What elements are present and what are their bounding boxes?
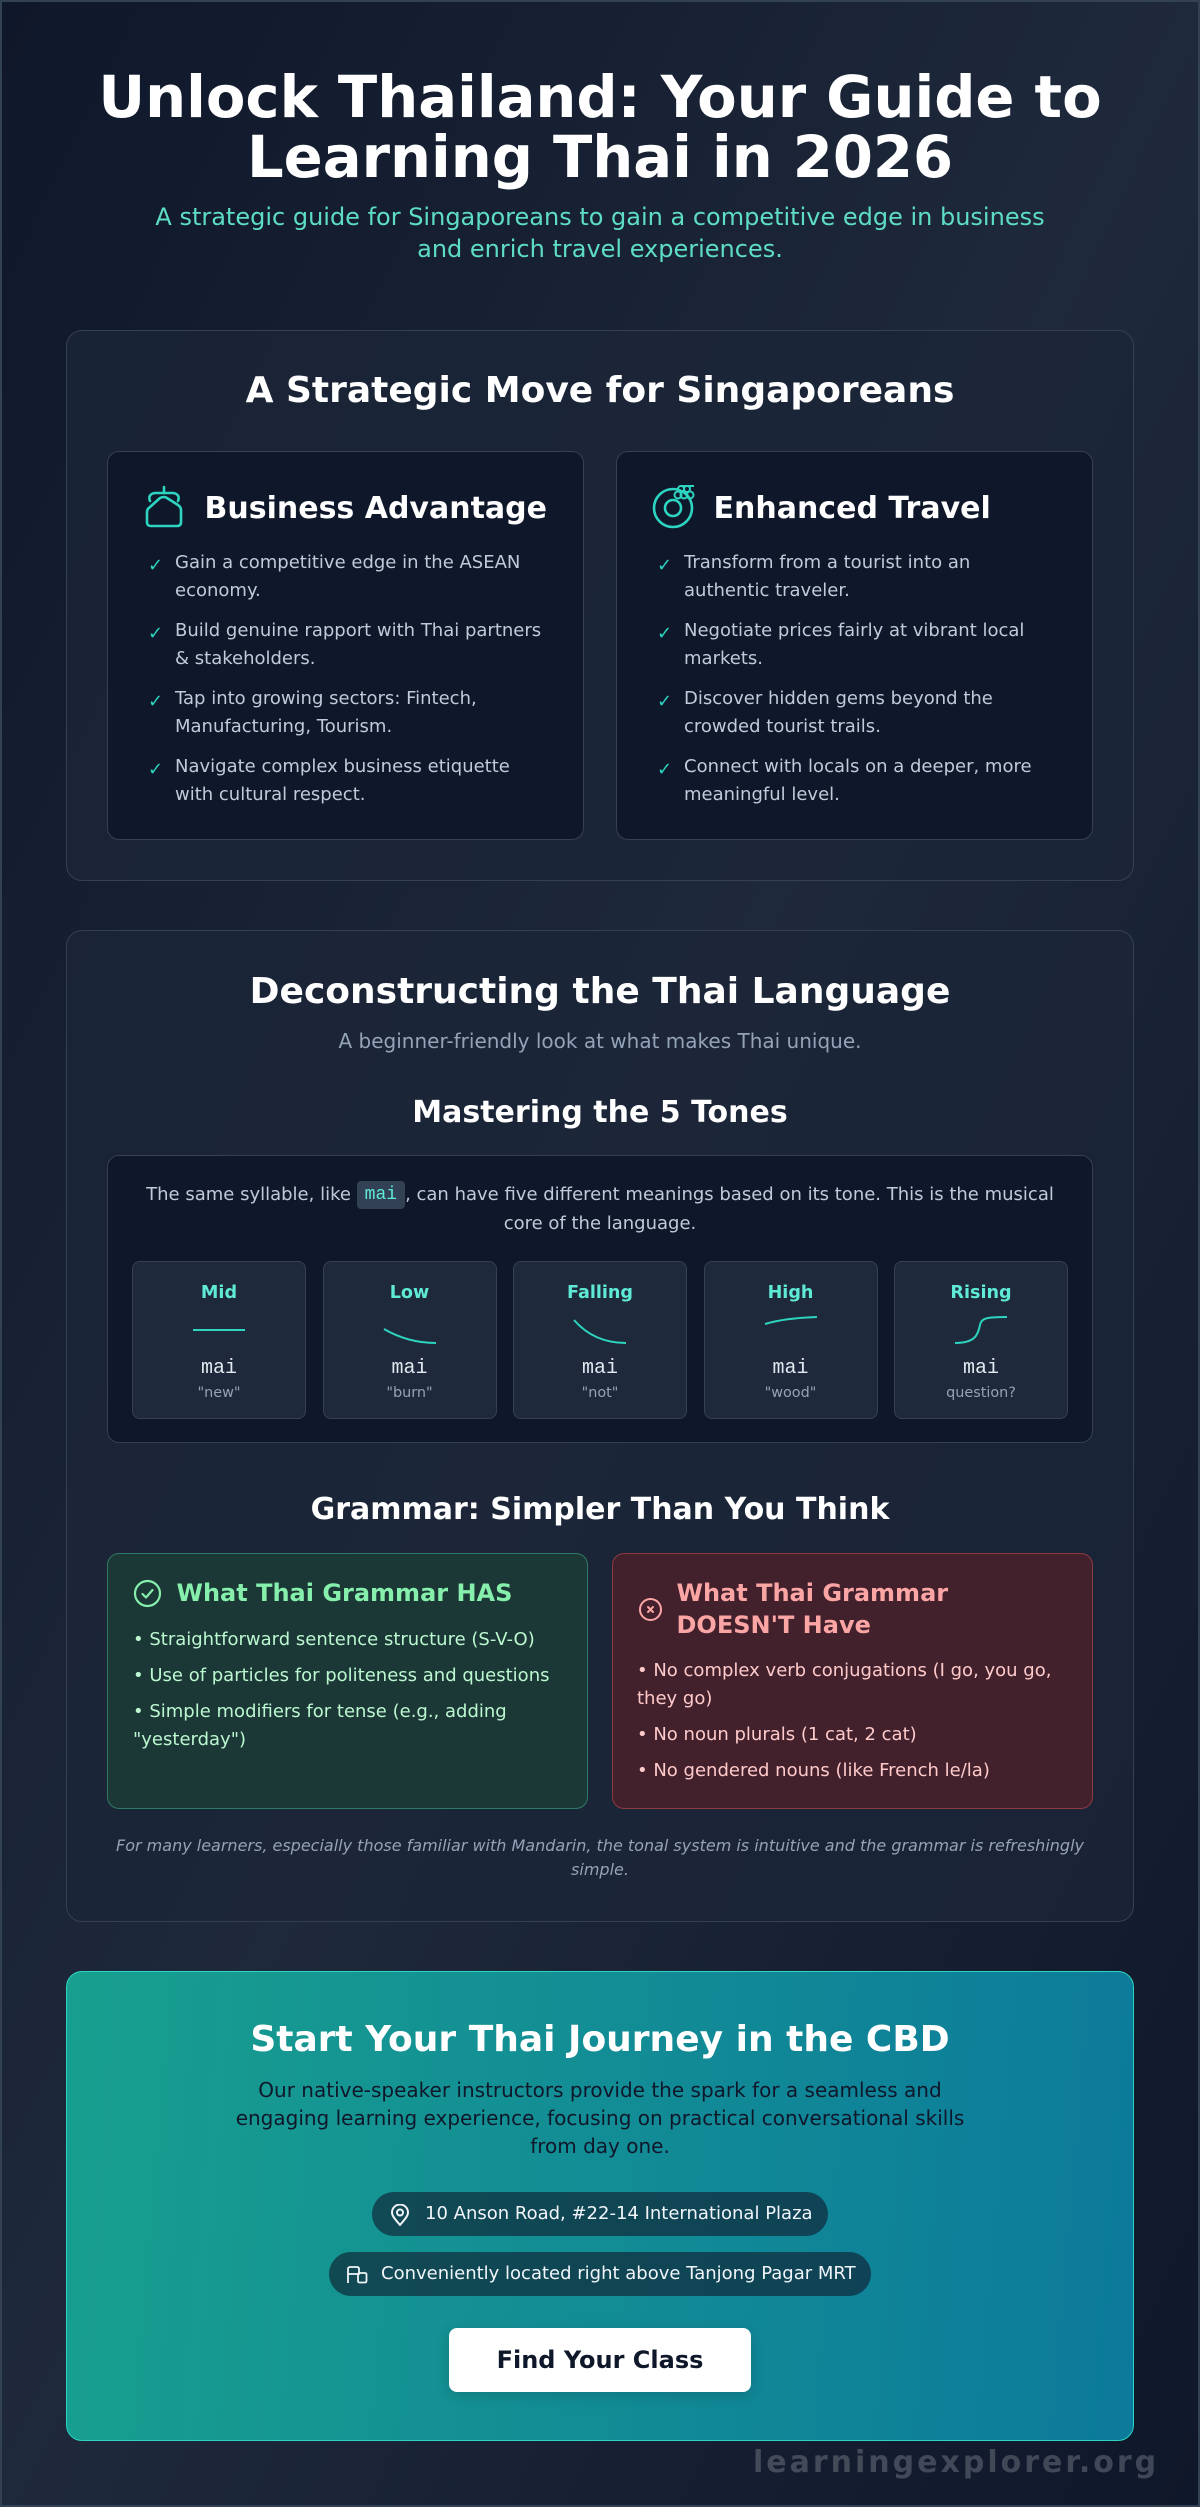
list: business points: Build genuine rapport with Thai partners	[175, 620, 541, 640]
button	[449, 2328, 751, 2392]
heading: grammar has: What Thai Grammar HAS	[176, 1578, 512, 1606]
text: ✓	[657, 622, 672, 644]
list: travel points: Negotiate prices fairly at vibrant local	[684, 620, 1024, 640]
panel: business advantage	[107, 451, 584, 840]
tone card: falling: Falling	[567, 1283, 633, 1303]
list: business points	[148, 552, 541, 804]
tone card: rising	[894, 1261, 1068, 1419]
panel: call to action	[66, 1971, 1134, 2441]
list: grammar doesn't have: • No complex verb conjugations (I go, you go,	[637, 1660, 1051, 1681]
heading: grammar doesn't have	[676, 1578, 948, 1638]
list: travel points: Discover hidden gems beyond the	[684, 688, 993, 708]
text: ✓	[148, 758, 163, 780]
icon: check circle	[134, 1580, 162, 1608]
heading: deconstructing: Deconstructing the Thai Language	[250, 971, 950, 1012]
title: Unlock Thailand: Your Guide to	[98, 64, 1102, 130]
list: grammar doesn't have	[637, 1660, 1051, 1781]
heading: tones: Mastering the 5 Tones	[412, 1094, 788, 1130]
text: ✓	[657, 690, 672, 712]
list: travel points	[657, 552, 1032, 804]
tone card: mid	[132, 1261, 306, 1419]
tone card: high: mai	[772, 1357, 808, 1380]
title	[98, 64, 1102, 190]
list: business points: Manufacturing, Tourism.	[175, 716, 392, 736]
tone card: mid: "new"	[198, 1385, 240, 1401]
list: grammar doesn't have: • No gendered nouns (like French le/la)	[637, 1760, 990, 1781]
icon: travel	[652, 485, 694, 528]
list: grammar has	[133, 1628, 549, 1750]
list: grammar has: "yesterday")	[133, 1728, 246, 1750]
heading: grammar: Grammar: Simpler Than You Think	[311, 1492, 889, 1527]
tone card: mid: Mid	[201, 1283, 237, 1303]
list: grammar doesn't have: • No noun plurals (1 cat, 2 cat)	[637, 1724, 917, 1745]
list: business points: Tap into growing sectors: Fintech,	[175, 688, 477, 708]
panel: deconstructing the language	[66, 930, 1134, 1922]
list: grammar doesn't have: they go)	[637, 1688, 712, 1709]
panel: strategic move	[66, 330, 1134, 881]
note: simple.	[571, 1860, 629, 1878]
tone card: high: High	[768, 1283, 813, 1303]
list: business points: Gain a competitive edge in the ASEAN	[175, 552, 520, 572]
tone card: falling	[513, 1261, 687, 1419]
tone card: high	[704, 1261, 878, 1419]
heading: enhanced travel: Enhanced Travel	[714, 490, 991, 526]
text: ✓	[148, 690, 163, 712]
heading: strategic move: A Strategic Move for Singaporeans	[246, 370, 954, 410]
list: travel points: Transform from a tourist into an	[684, 552, 970, 572]
list: business points: economy.	[175, 580, 261, 600]
tone card: low	[322, 1261, 496, 1419]
icon: x circle	[639, 1598, 662, 1621]
tone card: low: "burn"	[386, 1385, 433, 1401]
address pill	[372, 2192, 828, 2236]
tone card: high: "wood"	[765, 1385, 816, 1401]
panel: tones	[107, 1155, 1093, 1443]
panel: enhanced travel	[616, 451, 1093, 840]
list: travel points: meaningful level.	[684, 784, 840, 804]
tone card: low: Low	[390, 1283, 429, 1303]
tone card: mid: mai	[201, 1357, 237, 1380]
list: travel points: authentic traveler.	[684, 580, 850, 600]
list: business points: & stakeholders.	[175, 648, 316, 668]
button: Find Your Class	[497, 2346, 703, 2374]
call to action text: Our native-speaker instructors provide the spark for a seamless and	[258, 2078, 942, 2102]
heading: business advantage: Business Advantage	[204, 490, 547, 526]
title: Learning Thai in 2026	[247, 124, 953, 190]
tone card: low: mai	[391, 1357, 428, 1380]
subheading: A beginner-friendly look at what makes Thai unique.	[339, 1029, 861, 1053]
tone card: rising: Rising	[950, 1283, 1012, 1303]
tone card: falling: mai	[582, 1357, 618, 1380]
panel: grammar has	[107, 1553, 588, 1809]
heading: call to action: Start Your Thai Journey in the CBD	[250, 2019, 950, 2060]
tone card: rising: mai	[963, 1357, 999, 1380]
heading: grammar doesn't have: DOESN'T Have	[676, 1610, 871, 1638]
heading: grammar doesn't have: What Thai Grammar	[676, 1578, 948, 1606]
tones intro text: core of the language.	[504, 1213, 696, 1234]
watermark: learningexplorer.org	[753, 2445, 1159, 2480]
subtitle: and enrich travel experiences.	[417, 235, 783, 263]
note: For many learners, especially those familiar with Mandarin, the tonal system is intuitive and the grammar is refreshingly	[116, 1836, 1084, 1854]
tones intro text: mai	[365, 1185, 397, 1205]
subtitle	[155, 203, 1045, 263]
text: ✓	[657, 758, 672, 780]
list: business points: with cultural respect.	[175, 784, 365, 804]
text: ✓	[148, 554, 163, 576]
list: travel points: Connect with locals on a deeper, more	[684, 756, 1032, 776]
tone card: falling: "not"	[582, 1385, 618, 1401]
MRT pill: Conveniently located right above Tanjong Pagar MRT	[381, 2263, 856, 2284]
text: ✓	[657, 554, 672, 576]
list: travel points: markets.	[684, 648, 763, 668]
call to action text: engaging learning experience, focusing on practical conversational skills	[236, 2106, 964, 2130]
tone card: rising: question?	[946, 1385, 1016, 1401]
tones intro text	[146, 1181, 1054, 1234]
icon: business	[146, 486, 182, 528]
text: ✓	[148, 622, 163, 644]
tones intro text: The same syllable, like , can have five different meanings based on its tone. This is the musical	[146, 1184, 1054, 1205]
call to action text: from day one.	[530, 2134, 670, 2158]
MRT pill	[329, 2252, 871, 2296]
address pill: 10 Anson Road, #22-14 International Plaza	[425, 2203, 813, 2224]
list: grammar has: • Straightforward sentence structure (S-V-O)	[133, 1628, 535, 1650]
call to action text	[236, 2078, 964, 2158]
panel: grammar doesn't have	[612, 1553, 1093, 1809]
note	[116, 1836, 1084, 1878]
list: grammar has: • Simple modifiers for tense (e.g., adding	[133, 1700, 507, 1722]
subtitle: A strategic guide for Singaporeans to gain a competitive edge in business	[155, 203, 1045, 231]
list: travel points: crowded tourist trails.	[684, 716, 881, 736]
list: business points: Navigate complex business etiquette	[175, 756, 510, 776]
list: grammar has: • Use of particles for politeness and questions	[133, 1664, 549, 1686]
